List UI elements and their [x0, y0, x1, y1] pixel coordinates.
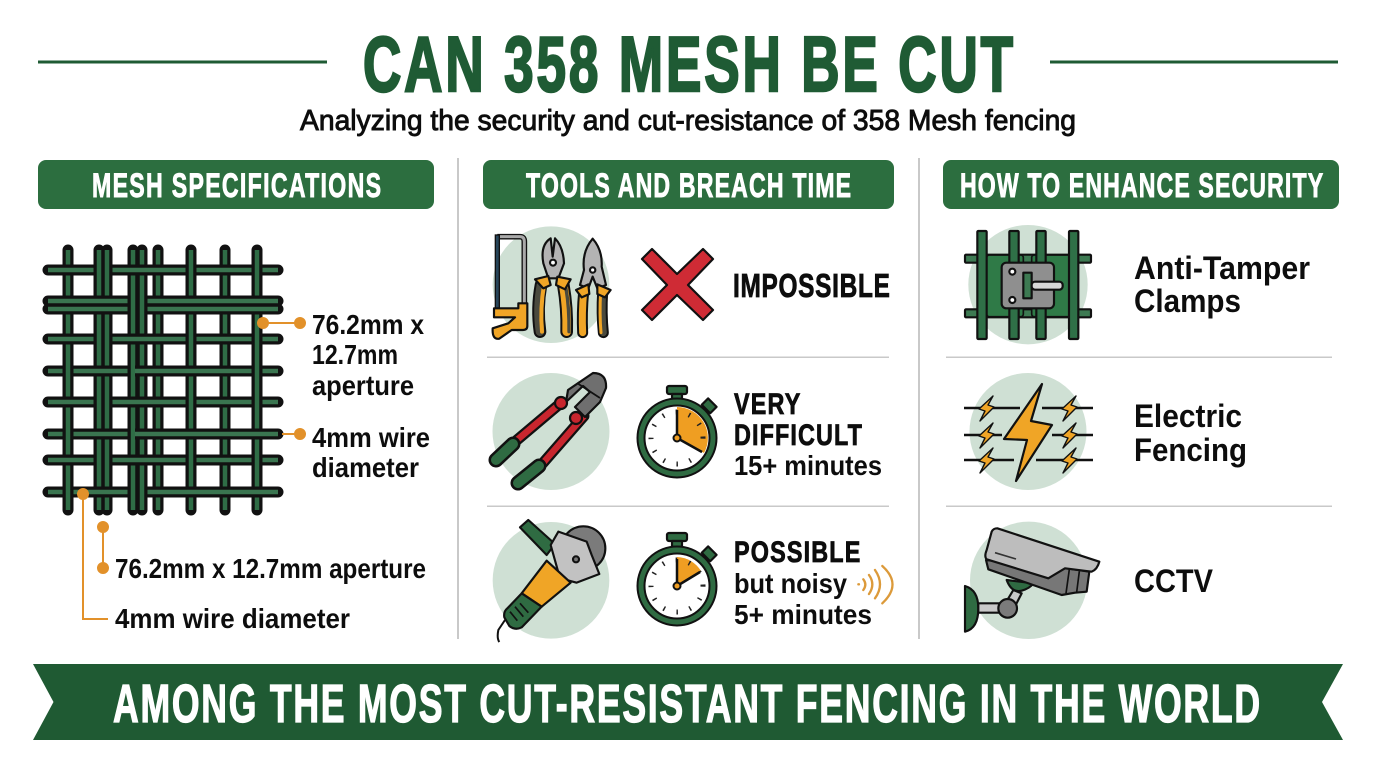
column dividers: [457, 158, 920, 639]
icon: anti-tamper clamp: [965, 225, 1091, 344]
text: electric fencing: Fencing: [1134, 432, 1247, 468]
text: very difficult: [734, 387, 882, 481]
callout: wire diameter right: diameter: [312, 452, 419, 483]
heading: tools and breach time: [483, 160, 894, 209]
callout: wire diameter bottom: 4mm wire diameter: [115, 603, 350, 634]
banner: [33, 664, 1343, 740]
heading: tools and breach time: TOOLS AND BREACH TIME: [526, 168, 851, 205]
icon: red cross: [642, 249, 713, 320]
icon: cctv camera: [965, 522, 1099, 639]
panel: tools and breach time: [483, 160, 894, 642]
callout: wire diameter right: 4mm wire: [312, 422, 430, 453]
text: anti-tamper clamps: Anti-Tamper: [1134, 250, 1310, 286]
callout: aperture right: [312, 309, 424, 401]
banner: AMONG THE MOST CUT-RESISTANT FENCING IN THE WORLD: [113, 674, 1260, 734]
heading: mesh specifications: [38, 160, 434, 209]
panel: mesh specifications: [38, 160, 434, 634]
text: very difficult: VERY: [734, 387, 800, 421]
icon: electric fencing: [964, 373, 1093, 490]
text: possible but noisy: 5+ minutes: [734, 599, 872, 630]
subtitle: Analyzing the security and cut-resistance of 358 Mesh fencing: [300, 105, 1076, 137]
text: impossible: IMPOSSIBLE: [733, 269, 890, 305]
heading: how to enhance security: HOW TO ENHANCE SECURITY: [960, 168, 1323, 205]
icon: bolt cutters: [492, 373, 610, 490]
heading: mesh specifications: MESH SPECIFICATIONS: [92, 168, 381, 205]
mesh diagram: [48, 250, 278, 510]
text: electric fencing: Electric: [1134, 398, 1242, 434]
text: possible but noisy: but noisy: [734, 568, 847, 599]
callout: wire diameter right: [312, 422, 430, 483]
icon: hand tools: [493, 226, 611, 343]
row dividers: [487, 356, 889, 507]
icon: sound waves: [858, 566, 892, 603]
callout: aperture bottom: 76.2mm x 12.7mm aperture: [115, 553, 426, 584]
text: cctv: CCTV: [1134, 563, 1214, 599]
title: CAN 358 MESH BE CUT: [363, 22, 1013, 109]
callout lines: [78, 318, 305, 619]
row dividers: [946, 356, 1332, 507]
text: anti-tamper clamps: Clamps: [1134, 283, 1241, 319]
text: very difficult: 15+ minutes: [734, 450, 882, 481]
callout: aperture right: 12.7mm: [312, 339, 398, 370]
icon: stopwatch 15 minutes: [641, 386, 717, 474]
icon: angle grinder: [493, 520, 609, 642]
callout: aperture right: 76.2mm x: [312, 309, 424, 340]
title: [38, 22, 1338, 109]
text: very difficult: DIFFICULT: [734, 418, 862, 452]
text: possible but noisy: [734, 535, 872, 630]
text: electric fencing: [1134, 398, 1247, 468]
icon: stopwatch 5 minutes: [641, 533, 717, 622]
text: anti-tamper clamps: [1134, 250, 1310, 319]
text: possible but noisy: POSSIBLE: [734, 535, 860, 569]
callout: aperture right: aperture: [312, 370, 414, 401]
panel: how to enhance security: [943, 160, 1339, 639]
